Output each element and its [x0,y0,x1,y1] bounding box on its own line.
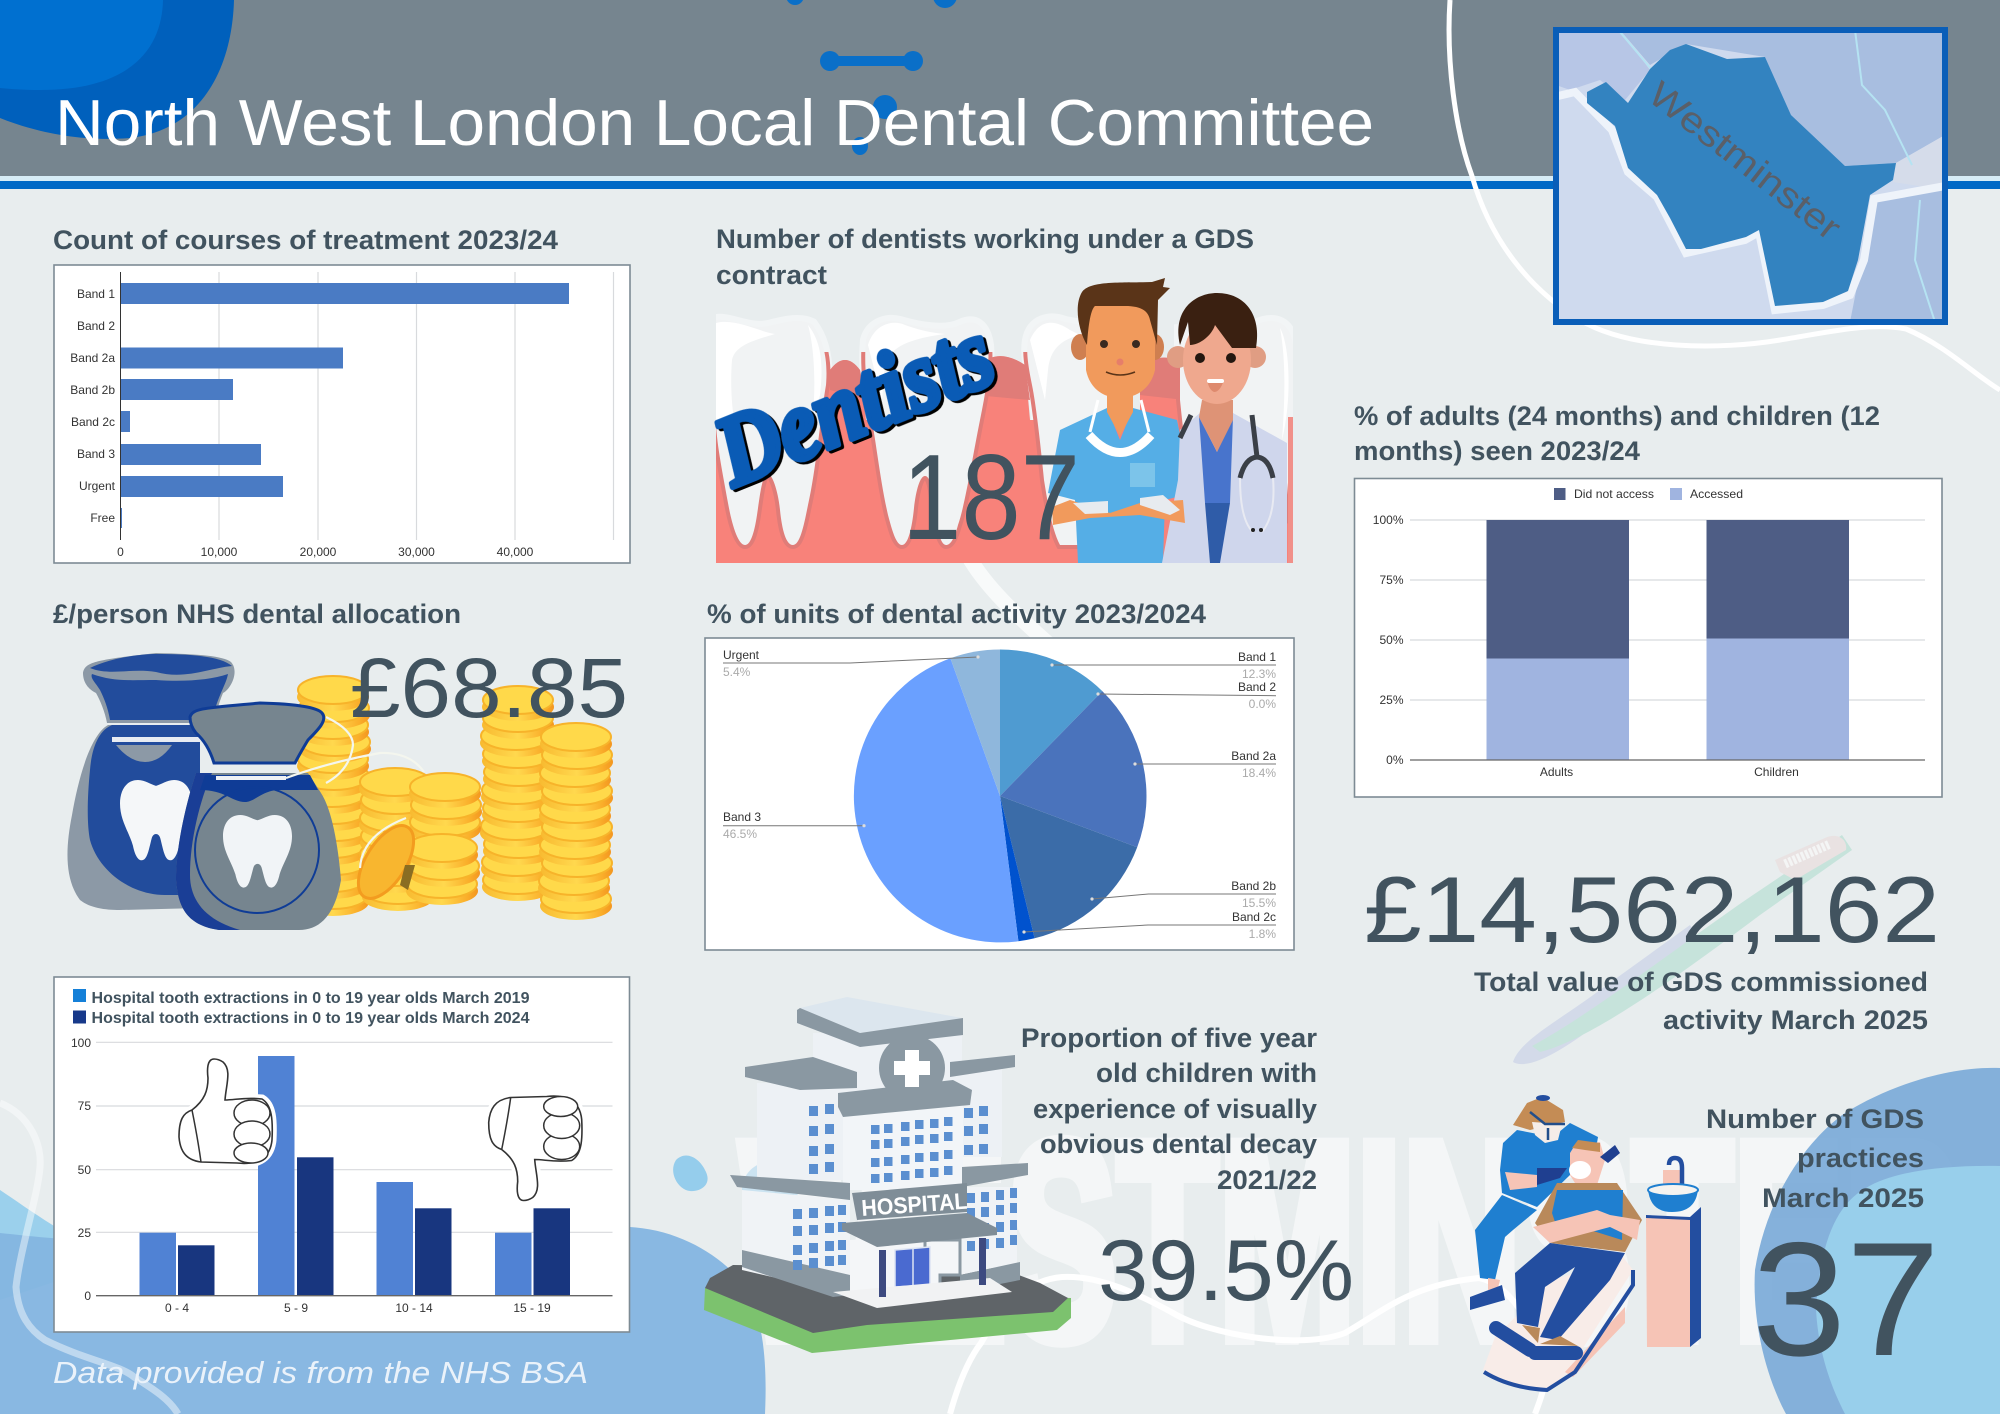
illustration: dentist treating patient [1470,1095,1701,1390]
illustration: back floss box [67,653,235,910]
heading: allocation: £/person NHS dental allocation [53,599,461,629]
header dumbbell decoration [786,0,957,155]
chart: courses of treatment: 40,000 [497,545,534,559]
heading: courses of treatment: Count of courses of treatment 2023/24 [53,225,558,255]
chart: adults and children access: Children [1754,765,1799,779]
chart: pie of units of dental activity: Band 1 [1238,650,1276,664]
header band [0,0,2000,189]
figure: £14,562,162: £14,562,162 [1364,857,1940,962]
chart: courses of treatment: Band 2b [70,383,115,397]
chart: courses of treatment: 0 [117,545,124,559]
illustration: hospital [704,997,1071,1353]
heading: units of dental activity: % of units of dental activity 2023/2024 [707,599,1206,629]
chart: pie of units of dental activity: 12.3% [1242,667,1276,681]
chart: pie of units of dental activity: 15.5% [1242,896,1276,910]
chart: courses of treatment: Band 1 [77,287,115,301]
illustration: front floss box [176,703,424,930]
chart: adults and children access: 75% [1379,573,1404,587]
illustration: hospital: HOSPITAL [861,1188,968,1221]
chart: pie of units of dental activity: 18.4% [1242,766,1276,780]
text: five year old decay: 2021/22 [1217,1165,1317,1195]
chart: hospital tooth extractions: 25 [78,1226,91,1240]
text: five year old decay: obvious dental decay [1040,1129,1317,1159]
chart: courses of treatment: 20,000 [300,545,337,559]
chart: hospital tooth extractions: Hospital tooth extractions in 0 to 19 year olds March 2024 [92,1010,530,1027]
text: five year old decay: Proportion of five year [1021,1023,1317,1053]
chart: adults and children access: 0% [1386,753,1404,767]
chart: courses of treatment: Band 3 [77,447,115,461]
chart: courses of treatment: Free [90,511,115,525]
text: number of GDS practices: Number of GDS [1706,1104,1924,1134]
chart: hospital tooth extractions: 0 [84,1289,91,1303]
chart: adults and children access: 50% [1379,633,1404,647]
map: Westminster [1556,30,1945,322]
chart: courses of treatment: 10,000 [201,545,238,559]
map: Westminster: Westminster [1641,73,1849,248]
illustration: dentists [1048,278,1287,563]
heading: adults and children seen: % of adults (24 months) and children (12 [1354,401,1880,431]
watermark: toothbrush [1513,835,1852,1064]
illustration label: Dentists: Dentists [699,297,1008,508]
chart: adults and children access: Accessed [1690,487,1743,501]
chart: adults and children access: 25% [1379,693,1404,707]
heading: number of dentists: contract [716,260,827,290]
text: number of GDS practices: practices [1797,1143,1924,1173]
chart: pie of units of dental activity: Band 2a [1231,749,1276,763]
text: number of GDS practices: March 2025 [1762,1183,1924,1213]
chart: hospital tooth extractions: 75 [78,1099,91,1113]
text: five year old decay: experience of visually [1033,1094,1317,1124]
chart: hospital tooth extractions: 0 - 4 [165,1301,189,1315]
chart: hospital tooth extractions [54,977,630,1332]
chart: pie of units of dental activity: 5.4% [723,665,751,679]
header blob [0,0,234,139]
chart: adults and children access: Adults [1540,765,1573,779]
figure: 37: 37 [1752,1209,1940,1390]
text: five year old decay: old children with [1096,1058,1317,1088]
chart: hospital tooth extractions: 10 - 14 [395,1301,433,1315]
text: number of GDS practices [1706,1104,1924,1213]
chart: pie of units of dental activity: Urgent [723,648,760,662]
chart: adults and children access: Did not access [1574,487,1654,501]
chart: hospital tooth extractions: 15 - 19 [513,1301,551,1315]
chart: pie of units of dental activity: Band 2b [1231,879,1276,893]
heading: number of dentists [716,224,1254,290]
chart: courses of treatment [54,265,630,563]
figure: 187 dentists: 187 [902,429,1080,565]
figure: 39.5%: 39.5% [1098,1223,1354,1319]
chart: courses of treatment: Band 2c [71,415,115,429]
illustration: coins [296,676,613,920]
heading: adults and children seen [1354,401,1880,466]
chart: pie of units of dental activity [705,638,1294,950]
chart: courses of treatment: 30,000 [398,545,435,559]
text: total value of GDS [1474,967,1928,1035]
text: total value of GDS: activity March 2025 [1663,1005,1928,1035]
chart: hospital tooth extractions: 50 [78,1163,91,1177]
source note: Data provided is from the NHS BSA [53,1355,588,1390]
chart: pie of units of dental activity: Band 2c [1232,910,1276,924]
chart: adults and children access [1354,478,1942,797]
chart: hospital tooth extractions: 100 [71,1036,91,1050]
text: total value of GDS: Total value of GDS commissioned [1474,967,1928,997]
text: five year old decay [1021,1023,1317,1195]
background blob: bottom left [0,1190,766,1414]
icon: thumbs down [489,1096,582,1200]
chart: hospital tooth extractions: Hospital tooth extractions in 0 to 19 year olds March 2019 [92,990,530,1007]
background blob: bottom right [1755,1068,2000,1414]
heading: adults and children seen: months) seen 2023/24 [1354,436,1640,466]
chart: courses of treatment: Urgent [79,479,116,493]
heading: number of dentists: Number of dentists working under a GDS [716,224,1254,254]
chart: pie of units of dental activity: Band 3 [723,810,761,824]
figure: £68.85: £68.85 [350,641,628,735]
chart: hospital tooth extractions: 5 - 9 [284,1301,308,1315]
icon: thumbs up [179,1059,272,1163]
decorative dot [673,1156,708,1191]
chart: pie of units of dental activity: 46.5% [723,827,757,841]
chart: adults and children access: 100% [1373,513,1404,527]
chart: pie of units of dental activity: 0.0% [1249,697,1276,711]
chart: courses of treatment: Band 2 [77,319,115,333]
illustration: teeth and gums [716,319,1293,563]
chart: pie of units of dental activity: Band 2 [1238,680,1276,694]
chart: pie of units of dental activity: 1.8% [1249,927,1276,941]
title: North West London Local Dental Committee [55,86,1374,159]
chart: courses of treatment: Band 2a [70,351,115,365]
